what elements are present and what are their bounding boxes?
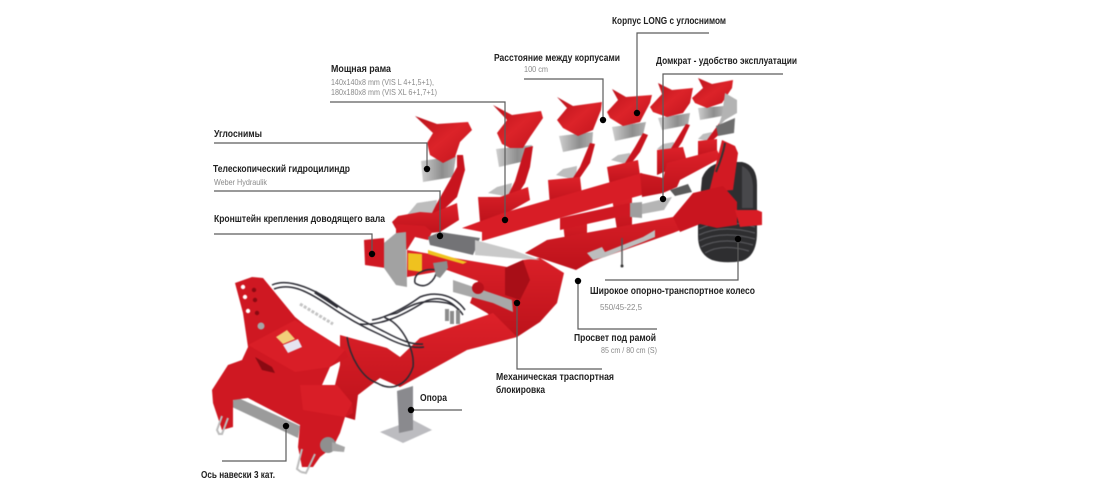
callout: Просвет под рамой: Просвет под рамой xyxy=(574,333,656,344)
hose fittings xyxy=(433,261,460,324)
callout: Углоснимы: Углоснимы xyxy=(214,129,262,140)
three-point headstock xyxy=(212,277,353,467)
body 4 xyxy=(607,89,652,165)
body 3 xyxy=(557,97,602,184)
body 6 xyxy=(692,78,733,140)
frame mounting blocks xyxy=(392,139,717,250)
transport wheel xyxy=(698,162,757,262)
rear end block xyxy=(364,238,385,268)
callout: Мощная рама: Мощная рама xyxy=(331,64,391,75)
callout: Механическая траспортная блокировка: Механическая траспортная xyxy=(496,372,614,383)
callout: Телескопический гидроцилиндр: Weber Hydraulik xyxy=(214,177,268,187)
callout: Ось навески 3 кат. xyxy=(201,423,289,481)
hydraulic hoses xyxy=(272,270,465,387)
callout: Телескопический гидроцилиндр xyxy=(213,164,443,239)
middle frame beam xyxy=(560,203,632,230)
jack stand xyxy=(380,386,432,443)
hydraulic cylinder xyxy=(428,232,540,260)
callout: Широкое опорно-транспортное колесо xyxy=(590,236,755,312)
rear skimmer bracket xyxy=(716,93,737,136)
callout: Мощная рама xyxy=(330,64,508,223)
lower link pin xyxy=(232,396,300,438)
callout: Расстояние между корпусами: Расстояние между корпусами xyxy=(494,53,620,64)
jack cylinder xyxy=(630,184,692,218)
callout: Кронштейн крепления доводящего вала xyxy=(214,214,385,257)
plough machine illustration xyxy=(212,78,762,473)
callout: Расстояние между корпусами: 100 cm xyxy=(524,64,548,74)
callout: Широкое опорно-транспортное колесо: Широкое опорно-транспортное колесо xyxy=(590,286,755,297)
body 2 xyxy=(493,105,543,204)
body 5 xyxy=(650,83,693,151)
coulter discs xyxy=(407,132,713,215)
callout: Домкрат - удобство эксплуатации: Домкрат - удобство эксплуатации xyxy=(656,55,797,67)
wheel axle block xyxy=(735,210,762,227)
lower frame beam xyxy=(525,202,713,270)
central gearbox and front frame xyxy=(396,224,564,337)
callout: Углоснимы xyxy=(214,129,430,172)
safety chain xyxy=(300,304,333,324)
callout: Опора: Опора xyxy=(420,393,447,404)
callout: Корпус LONG с углоснимом: Корпус LONG с углоснимом xyxy=(612,16,726,27)
wheel tower xyxy=(709,140,738,192)
callout: Расстояние между корпусами xyxy=(494,53,620,123)
body 1 xyxy=(415,116,472,217)
callout: Мощная рама: 180x180x8 mm (VIS XL 6+1,7+1) xyxy=(331,87,437,97)
callout: Ось навески 3 кат.: Ось навески 3 кат. xyxy=(201,470,275,481)
callout: Домкрат - удобство эксплуатации xyxy=(656,55,797,202)
wheel arm gearbox xyxy=(673,186,737,232)
plough bodies far to near xyxy=(415,78,733,217)
callout: Опора xyxy=(408,393,462,413)
sticker: white xyxy=(283,339,302,353)
upper frame beam xyxy=(462,173,642,241)
callout: Широкое опорно-транспортное колесо: 550/45-22,5 xyxy=(600,302,642,312)
callout: Просвет под рамой: 85 cm / 80 cm (S) xyxy=(601,345,657,355)
joint and rear frame beam xyxy=(640,150,721,197)
yellow warning sticker xyxy=(408,253,422,272)
callout: Просвет под рамой xyxy=(574,278,657,355)
hooks and ball xyxy=(217,416,345,473)
callout: Телескопический гидроцилиндр: Телескопический гидроцилиндр xyxy=(213,164,350,175)
callout: Кронштейн крепления доводящего вала: Кронштейн крепления доводящего вала xyxy=(214,214,385,225)
adjustment link xyxy=(587,230,655,268)
callout: Механическая траспортная блокировка xyxy=(496,300,614,396)
sticker: yellow xyxy=(276,330,295,344)
rear plate with bolts xyxy=(384,232,407,287)
lock plate xyxy=(453,280,513,312)
callout: Мощная рама: 140x140x8 mm (VIS L 4+1,5+1), xyxy=(331,77,434,87)
callout: Корпус LONG с углоснимом xyxy=(612,16,726,116)
callout: Механическая траспортная блокировка: блокировка xyxy=(496,384,545,396)
drawbar xyxy=(335,313,517,420)
